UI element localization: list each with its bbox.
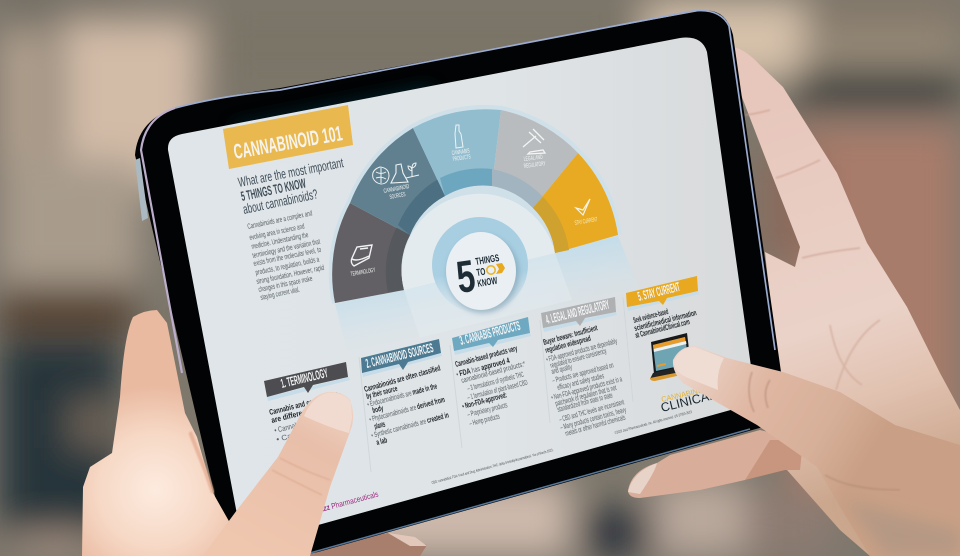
body: sources: • Endocannabinoids are made in the: [366, 382, 438, 409]
body: stay current: [632, 307, 698, 340]
segment: cannabinoid sources: [350, 128, 445, 235]
header: 5. Stay Current: 5. STAY CURRENT: [636, 279, 681, 304]
wheel halo: [329, 105, 622, 304]
icon: gavel: [523, 129, 545, 154]
bezel tint: [230, 85, 440, 135]
body: terminology: • Cannabis: [275, 425, 317, 444]
body: legal: • Non-FDA-approved products exist in a: [550, 374, 623, 402]
intro paragraph: terminology and the variation that: [252, 237, 321, 260]
heading: 5 things question: 5 THINGS TO KNOW: [240, 176, 307, 204]
column dividers: [359, 297, 633, 472]
intro paragraph: products, to regulation, builds a: [255, 255, 320, 277]
white disc shadow: [447, 235, 519, 313]
intro paragraph: evolving area in science and: [249, 222, 305, 242]
icon: flask: [391, 164, 408, 183]
column 4: legal and regulatory: [541, 297, 627, 438]
banner: Cannabinoid 101: CANNABINOID 101: [232, 122, 344, 164]
body: terminology: Cannabis and cannabinoids: [268, 390, 343, 417]
body: legal: • FDA-approved products are dependably: [545, 336, 618, 364]
body: sources: [363, 363, 450, 447]
body: terminology: • Cannabinoids: [273, 416, 314, 435]
body: products: Cannabis-based products vary: [454, 344, 519, 369]
column 5: stay current: [626, 276, 717, 415]
tablet screen: 3. CANNABIS PRODUCTS: [458, 318, 522, 348]
intro paragraph: medicine. Understanding the: [251, 230, 309, 251]
intro paragraph: exists from the molecular level, to: [253, 245, 322, 268]
segment: terminology: [332, 203, 410, 303]
segment: terminology: TERMINOLOGY: [350, 267, 376, 278]
copyright line: ©2023 Jazz Pharmaceuticals, Inc. All rights reserved. US-27950-2023: [614, 410, 692, 435]
right hand thumb: [673, 346, 960, 556]
label: legal: [523, 154, 546, 170]
bottom left finger under tablet: [300, 533, 427, 556]
segment: stay current: STAY CURRENT: [574, 216, 598, 227]
heading: 5 things question: [237, 155, 345, 217]
icon: sprout: [406, 163, 419, 178]
body: sources: • Phytocannabinoids are derived from: [368, 395, 446, 424]
heading: 5 things question: What are the most important: [237, 155, 345, 190]
body: legal: regulated to ensure consistency: [549, 346, 608, 370]
body: sources: plants: [373, 419, 386, 431]
left hand thumb: [203, 392, 353, 556]
white disc: [446, 232, 516, 310]
icon: brain: [373, 167, 389, 184]
label: products: PRODUCTS: [452, 154, 471, 163]
body: products: [454, 344, 529, 428]
header: 4. Legal and Regulatory: [541, 297, 617, 332]
side button: [135, 158, 148, 221]
body: terminology: [268, 390, 343, 444]
tablet screen: [168, 38, 755, 546]
segment: stay current: [533, 153, 618, 253]
left thumbnail: [304, 393, 352, 433]
label: sources: CANNABINOID: [383, 183, 410, 195]
heading: 5 things question: about cannabinoids?: [242, 186, 319, 217]
hub centre: [402, 194, 572, 338]
body: products: – 3 formulations of synthetic THC: [466, 370, 525, 393]
column 3: cannabis products: [452, 317, 531, 428]
icon: check mark: [576, 199, 590, 215]
logo: 5 things to know: [454, 252, 505, 303]
body: stay current: scientific/medical information: [633, 308, 698, 333]
logo: 5 things to know: TO: [476, 267, 487, 279]
icon: gear arrow: [487, 263, 505, 274]
icon: laptop: [650, 333, 695, 381]
body: sources: Cannabinoids are often classified: [363, 363, 442, 394]
body: legal: metals or other harmful chemicals: [564, 413, 626, 438]
header: 1. Terminology: 1. TERMINOLOGY: [279, 365, 330, 391]
label: sources: SOURCES: [389, 191, 406, 201]
body: products: • Non-FDA-approved:: [461, 390, 508, 411]
tablet screen: 4. LEGAL AND REGULATORY: [544, 297, 611, 327]
logo: 5 things to know: KNOW: [477, 276, 499, 290]
body: legal: standardized from state to state: [556, 390, 614, 414]
footnote abbreviations: CBD: cannabidiol; FDA: Food and Drug Administration; THC: delta-9-tetrahydrocannabinol. *As of March 2023.: [431, 448, 554, 485]
body: sources: • Synthetic cannabinoids are created in: [370, 411, 450, 440]
right hand lower finger: [628, 430, 803, 498]
logo: Cannabinoid Clinical: CANNABINOID: [660, 384, 712, 404]
thumbnail: [674, 347, 724, 390]
tablet bottom rim: [310, 429, 750, 553]
body: legal: and quality: [550, 362, 573, 376]
tablet top rim: [175, 11, 775, 350]
body: sources: body: [371, 403, 384, 415]
segment: cannabis products: [413, 109, 501, 196]
banner: Cannabinoid 101: [223, 105, 353, 169]
semicircle wheel: [329, 105, 622, 304]
blue ring: [432, 217, 528, 313]
label: legal: REGULATORY: [523, 160, 546, 170]
body: legal: Buyer beware: Insufficient: [542, 323, 599, 347]
segment: legal and regulatory: [492, 110, 578, 208]
intro paragraph: strong foundation. However, rapid: [256, 263, 325, 286]
body: products: • FDA has approved 4: [455, 356, 511, 379]
tablet body: [135, 10, 785, 556]
body: sources: by their source: [365, 384, 399, 401]
logo: 5 things to know: 5: [454, 252, 478, 303]
column 1: terminology: [264, 362, 350, 444]
body: products: – 1 formulation of plant-based CBD: [466, 378, 529, 402]
icon: bottle: [455, 125, 463, 148]
tablet rim highlight: [141, 108, 182, 373]
label: products: CANNABIS: [451, 148, 470, 157]
left hand palm and index: [82, 310, 230, 556]
body: legal: patchwork of regulation that is not: [554, 383, 618, 408]
intro paragraph: [247, 208, 325, 302]
intro paragraph: staying current vital.: [260, 285, 301, 302]
right hand index finger and palm behind tablet: [733, 47, 960, 556]
label: sources: [383, 183, 410, 201]
body: products: – Hemp products: [468, 412, 501, 428]
reflection below wheel: [335, 236, 640, 362]
column 2: cannabinoid sources: [361, 339, 450, 447]
body: stay current: at CannabinoidClinical.com: [634, 317, 691, 340]
intro paragraph: Cannabinoids are a complex and: [247, 208, 313, 231]
body: products: – Proprietary products: [466, 400, 508, 419]
body: sources: a lab: [375, 436, 388, 447]
body: legal: – Products are approved based on: [551, 360, 614, 385]
body: legal: [542, 323, 627, 438]
body: terminology: are different: [270, 407, 310, 425]
body: products: cannabinoid-based products:*: [460, 359, 526, 385]
icon: book: [351, 245, 372, 266]
body: legal: regulation widespread: [544, 334, 592, 355]
intro paragraph: changes in this space make: [258, 274, 313, 294]
body: legal: – CBD and THC levels are inconsistent: [558, 397, 626, 424]
logo: Cannabinoid Clinical: CLINICAL: [659, 388, 717, 415]
body: legal: efficacy and safety studies: [556, 371, 605, 392]
logo: Jazz Pharmaceuticals: Jazz Pharmaceuticals: [315, 490, 379, 515]
logo: 5 things to know: THINGS: [475, 253, 500, 268]
body: stay current: Seek evidence-based: [632, 307, 669, 325]
tablet screen: 2. CANNABINOID SOURCES: [364, 340, 435, 371]
label: legal: LEGAL AND: [523, 154, 543, 163]
body: legal: – Many products contain toxins, heavy: [559, 405, 627, 432]
label: products: [451, 148, 471, 163]
